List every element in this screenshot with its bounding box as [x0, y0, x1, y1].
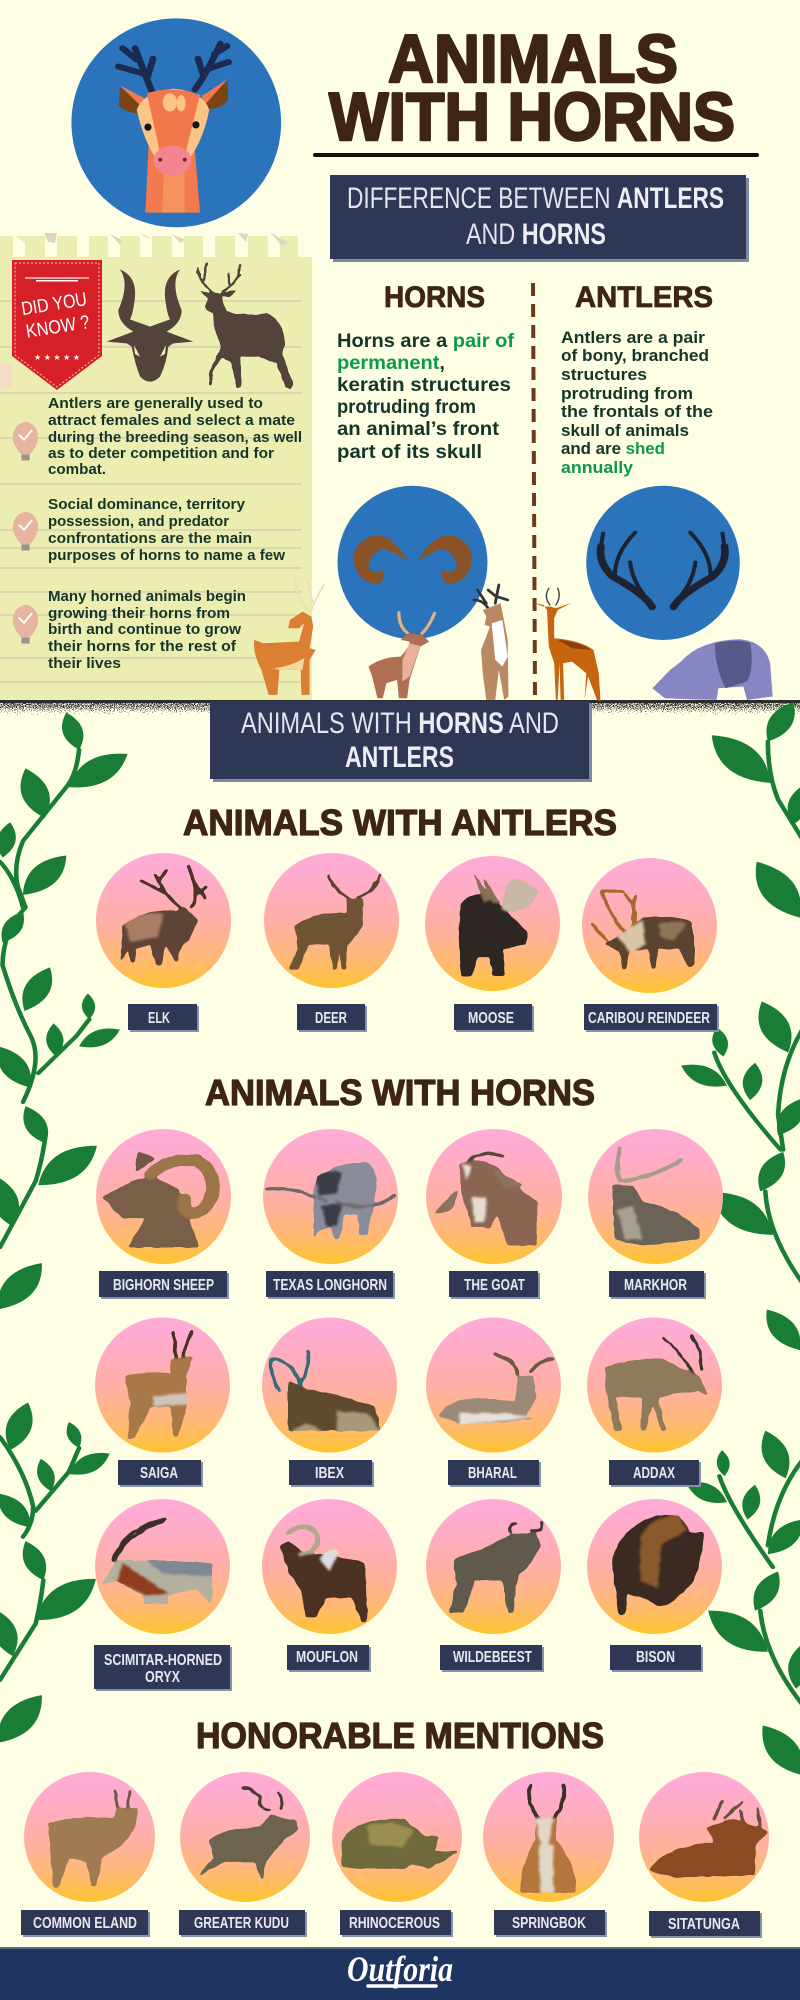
text: antlers description: of bony, branched [561, 346, 709, 365]
card: texas longhorn: TEXAS LONGHORN [273, 1277, 387, 1294]
illustration: brown deer [369, 613, 435, 698]
icon: left vine top [0, 710, 136, 1317]
list item: horn growth: birth and continue to grow [48, 621, 241, 638]
list item: antlers purpose [13, 395, 302, 478]
list item: antlers purpose: during the breeding season, as well [48, 429, 302, 446]
card: moose: MOOSE [468, 1010, 514, 1027]
card: bharal: BHARAL [468, 1465, 517, 1482]
text: horns description: an animal’s front [337, 418, 500, 440]
list item: antlers purpose: Antlers are generally used to [48, 395, 263, 412]
card: caribou reindeer: CARIBOU REINDEER [588, 1010, 710, 1027]
card: scimitar-horned oryx [94, 1499, 232, 1691]
footer [0, 1947, 800, 2000]
text: antlers description [561, 328, 713, 477]
logo: outforia: Outforia [347, 1949, 453, 1989]
heading: antlers: ANTLERS [575, 281, 713, 314]
card: caribou reindeer [582, 858, 719, 1032]
card: wildebeest: WILDEBEEST [453, 1649, 532, 1666]
list item: horn growth [13, 588, 246, 672]
card: rhinocerous [332, 1772, 462, 1937]
text: antlers description: and are shed [561, 439, 665, 458]
ribbon: did you know: DID YOU [20, 289, 88, 320]
card: the goat: THE GOAT [464, 1277, 525, 1294]
card: elk: ELK [148, 1010, 170, 1027]
icon: ram horns in blue circle [337, 486, 487, 639]
title: WITH HORNS [329, 79, 735, 155]
list item: horns purpose [13, 496, 285, 564]
card: saiga: SAIGA [140, 1465, 178, 1482]
card: scimitar-horned oryx: SCIMITAR-HORNED [104, 1652, 222, 1669]
card: bison [587, 1499, 722, 1672]
card: addax: ADDAX [633, 1465, 675, 1482]
icon: stag silhouette [197, 263, 293, 389]
card: deer: DEER [315, 1010, 347, 1027]
text: antlers description: annually [561, 458, 634, 477]
card: markhor: MARKHOR [624, 1277, 687, 1294]
text: antlers description: structures [561, 365, 647, 384]
ribbon: did you know: KNOW ? [25, 312, 91, 343]
card: the goat [426, 1129, 562, 1299]
card: sitatunga [639, 1772, 769, 1938]
list item: antlers purpose: combat. [48, 461, 106, 478]
card: bharal [426, 1318, 561, 1487]
icon: giraffe deer head in blue circle [71, 18, 281, 227]
list item: horns purpose: possession, and predator [48, 513, 229, 530]
illustration: gazelle [533, 588, 601, 702]
banner: difference between antlers and horns: DIFFERENCE BETWEEN ANTLERS [347, 182, 724, 215]
card: wildebeest [426, 1499, 561, 1672]
ribbon: did you know: ★ ★ ★ ★ ★ [34, 353, 80, 362]
card: sitatunga: SITATUNGA [668, 1916, 740, 1933]
card: common eland: COMMON ELAND [33, 1915, 137, 1932]
card: texas longhorn [263, 1129, 398, 1299]
list item: horns purpose: purposes of horns to name a few [48, 547, 285, 564]
card: mouflon: MOUFLON [296, 1649, 358, 1666]
card: rhinocerous: RHINOCEROUS [349, 1915, 440, 1932]
text: antlers description: Antlers are a pair [561, 328, 705, 347]
card: ibex [262, 1318, 397, 1487]
list item: horn growth: Many horned animals begin [48, 588, 246, 605]
icon: right vine top [676, 698, 800, 1356]
card: deer [264, 853, 399, 1032]
card: scimitar-horned oryx: ORYX [145, 1669, 180, 1686]
list item: antlers purpose: as to deter competition and for [48, 445, 274, 462]
text: horns description [337, 330, 515, 463]
banner: difference between antlers and horns [330, 175, 749, 262]
card: greater kudu: GREATER KUDU [194, 1915, 289, 1932]
banner: animals with horns and antlers [210, 701, 592, 782]
divider dashed line [533, 283, 535, 698]
text: horns description: keratin structures [337, 374, 511, 396]
title: ANIMALS [388, 21, 678, 97]
card: bighorn sheep: BIGHORN SHEEP [113, 1277, 214, 1294]
card: ibex: IBEX [315, 1465, 344, 1482]
card: saiga [95, 1318, 230, 1487]
heading: animals with antlers: ANIMALS WITH ANTLERS [183, 802, 617, 843]
card: springbok [483, 1772, 614, 1937]
banner: animals with horns and antlers: ANIMALS WITH HORNS AND [241, 707, 559, 740]
text: antlers description: the frontals of the [561, 402, 713, 421]
card: elk [96, 853, 231, 1032]
card: moose [425, 856, 560, 1032]
card: mouflon [262, 1499, 397, 1672]
card: bison: BISON [636, 1649, 675, 1666]
icon: bulb [13, 511, 38, 550]
text: horns description: protruding from [337, 396, 476, 418]
icon: bulb [13, 421, 38, 460]
list item: antlers purpose: attract females and select a mate [48, 412, 295, 429]
text: horns description: part of its skull [337, 441, 482, 463]
icon: right vine bottom [681, 1427, 800, 1783]
panel: did you know note paper [0, 230, 312, 702]
text: antlers description: skull of animals [561, 421, 689, 440]
illustration: tall white-chested deer [474, 585, 508, 700]
illustration: orange deer [254, 577, 324, 695]
list item: horns purpose: confrontations are the main [48, 530, 252, 547]
icon: bulb [13, 604, 38, 643]
card: springbok: SPRINGBOK [512, 1915, 586, 1932]
text: horns description: permanent, [337, 352, 445, 374]
list item: horn growth: their lives [48, 655, 121, 672]
card: addax [587, 1318, 722, 1487]
card: greater kudu [179, 1772, 310, 1937]
heading: animals with horns: ANIMALS WITH HORNS [205, 1072, 595, 1113]
card: bighorn sheep [96, 1129, 231, 1299]
list item: horn growth: their horns for the rest of [48, 638, 237, 655]
banner: animals with horns and antlers: ANTLERS [345, 741, 454, 774]
illustration: purple rhino [652, 639, 773, 700]
title rule [313, 153, 759, 157]
dark speckled ground band [0, 700, 800, 724]
banner: difference between antlers and horns: AND HORNS [466, 218, 606, 251]
text: horns description: Horns are a pair of [337, 330, 515, 352]
title [329, 21, 735, 155]
icon: left vine bottom [0, 1399, 115, 1751]
heading: horns: HORNS [384, 281, 485, 314]
card: common eland [21, 1772, 155, 1937]
list item: horn growth: growing their horns from [48, 605, 230, 622]
list item: horns purpose: Social dominance, territory [48, 496, 246, 513]
ribbon: did you know [12, 260, 102, 390]
card: markhor [588, 1129, 723, 1299]
heading: honorable mentions: HONORABLE MENTIONS [196, 1715, 604, 1756]
text: antlers description: protruding from [561, 384, 693, 403]
icon: antlers in blue circle [586, 486, 740, 640]
icon: bull head silhouette [107, 269, 193, 382]
